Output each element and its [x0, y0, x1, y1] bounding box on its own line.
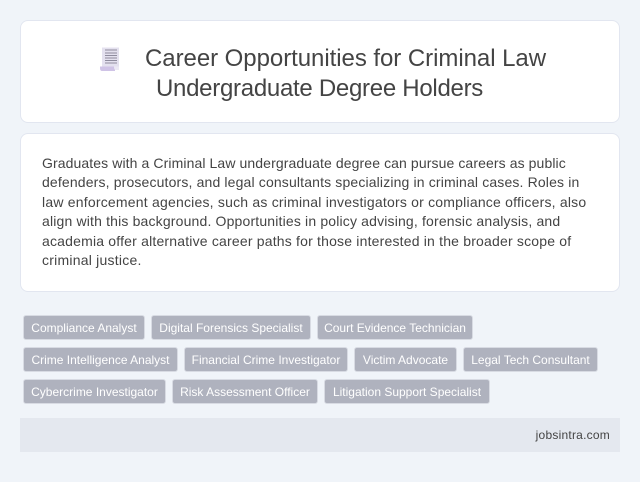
tag: Digital Forensics Specialist	[159, 321, 303, 335]
description text: defenders, prosecutors, and legal consultants specializing in criminal cases. Roles in	[42, 174, 579, 190]
description text	[42, 155, 586, 268]
description text: academia offer alternative career paths for those interested in the broader scope of	[42, 233, 571, 249]
footer source text: jobsintra.com	[536, 428, 610, 442]
description text: criminal justice.	[42, 252, 142, 268]
description text: Graduates with a Criminal Law undergraduate degree can pursue careers as public	[42, 155, 566, 171]
tag	[23, 315, 145, 340]
tag: Litigation Support Specialist	[333, 385, 481, 399]
tag: Court Evidence Technician	[324, 321, 466, 335]
tag: Legal Tech Consultant	[471, 353, 590, 367]
description text: law enforcement agencies, such as criminal investigators or compliance officers, also	[42, 194, 586, 210]
tag: Financial Crime Investigator	[192, 353, 340, 367]
tag	[172, 379, 318, 404]
tag	[317, 315, 473, 340]
tag: Compliance Analyst	[31, 321, 137, 335]
icon: document scroll	[100, 48, 119, 71]
tag: Cybercrime Investigator	[31, 385, 158, 399]
header panel	[20, 20, 620, 123]
tag: Victim Advocate	[363, 353, 448, 367]
tag	[151, 315, 311, 340]
title: Career Opportunities for Criminal Law	[145, 44, 546, 72]
tag	[184, 347, 348, 372]
tag	[23, 347, 178, 372]
footer bar	[20, 418, 620, 452]
title line 2: Undergraduate Degree Holders	[156, 75, 483, 102]
tag	[463, 347, 598, 372]
tag	[23, 379, 166, 404]
description panel	[20, 133, 620, 292]
tag	[354, 347, 457, 372]
tag: Crime Intelligence Analyst	[31, 353, 170, 367]
tag: Risk Assessment Officer	[180, 385, 310, 399]
tag	[324, 379, 490, 404]
description text: align with this background. Opportunities in policy advising, forensic analysis, and	[42, 213, 560, 229]
